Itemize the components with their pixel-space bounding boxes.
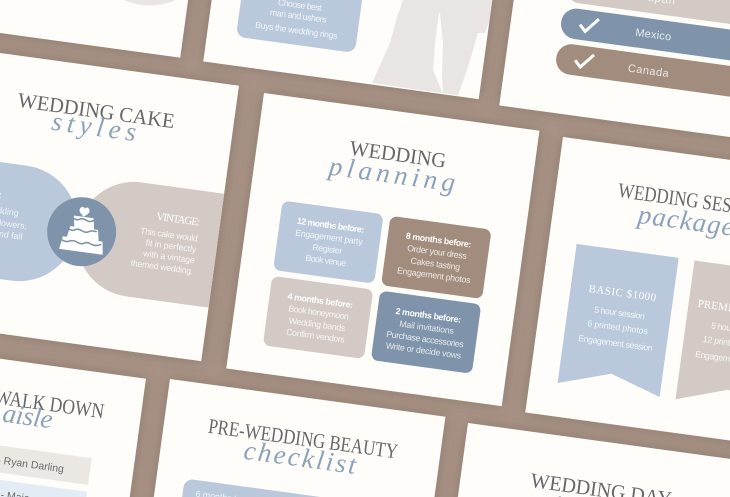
script subtitle: planning xyxy=(325,150,457,198)
list row: maid xyxy=(0,465,87,497)
box: 12 months: Book venue xyxy=(305,253,347,268)
card: top right destinations xyxy=(499,0,730,143)
taupe blob: This cake would xyxy=(140,226,199,244)
pill: Mexico: Mexico xyxy=(635,27,672,44)
silhouette: couple xyxy=(372,0,492,96)
box: 8 months: Order your dress xyxy=(407,243,468,261)
box: 12 months xyxy=(273,201,384,284)
box: 4 months: Book honeymoon xyxy=(288,303,350,322)
box: 4 months: 4 months before: xyxy=(287,291,354,310)
banner: basic: 5 hour session xyxy=(594,304,646,321)
box: 8 months: Cakes tasting xyxy=(410,255,461,272)
box: 4 months: Wedding bands xyxy=(288,316,347,333)
pill: Mexico xyxy=(559,7,730,63)
card: wedding cake styles xyxy=(0,48,239,361)
card: wedding day xyxy=(430,423,730,497)
script subtitle: styles xyxy=(50,106,138,147)
box: 2 months: Mail invitations xyxy=(399,319,455,336)
card: top centre groomsmen xyxy=(203,0,516,99)
script subtitle: checklist xyxy=(242,435,360,480)
banner: premium xyxy=(675,260,730,413)
blue text box: man and ushers xyxy=(269,7,328,25)
taupe blob xyxy=(69,175,224,308)
blue blob xyxy=(0,155,85,289)
card: walk down the aisle xyxy=(0,341,146,497)
banner: basic xyxy=(558,244,679,397)
box: 2 months: Write or decide vows xyxy=(385,340,462,361)
decorative shape xyxy=(78,0,222,14)
box: 4 months xyxy=(263,276,373,359)
box: 2 months: Purchase accessories xyxy=(386,329,465,349)
taupe blob: fit in perfectly xyxy=(145,238,198,254)
list row: best man xyxy=(0,432,92,485)
card: wedding planning xyxy=(226,93,539,406)
banner: basic: BASIC $1000 xyxy=(588,283,657,304)
icon: cake xyxy=(43,193,121,271)
box: 8 months xyxy=(381,216,492,299)
box: 12 months: Engagement party xyxy=(295,228,364,247)
banner: basic: 6 printed photos xyxy=(587,318,649,336)
box: 4 months: Confirm vendors xyxy=(286,327,346,345)
card: wedding session packages xyxy=(525,137,730,450)
box: 12 months: Register xyxy=(312,242,343,256)
card: pre-wedding beauty checklist xyxy=(132,379,445,497)
blue text box xyxy=(236,0,372,53)
pill: taupe xyxy=(564,0,730,27)
taupe blob: VINTAGE: xyxy=(156,211,201,229)
taupe blob: with a vintage xyxy=(142,248,196,265)
title: WEDDING xyxy=(348,136,448,173)
blue text box: Buys the wedding rings xyxy=(255,20,339,41)
blue box xyxy=(175,478,405,497)
box: 2 months: 2 months before: xyxy=(395,306,462,325)
card: top left xyxy=(0,0,236,60)
title: WEDDING CAKE xyxy=(16,88,176,133)
box: 12 months: 12 months before: xyxy=(296,216,365,235)
pill: Canada xyxy=(554,42,730,98)
banner: basic: Engagement session xyxy=(578,333,653,353)
taupe blob: themed wedding. xyxy=(130,258,194,276)
pill: Canada: Canada xyxy=(627,63,670,80)
box: 2 months xyxy=(371,291,481,374)
box: 8 months: 8 months before: xyxy=(405,231,472,250)
box: 8 months: Engagement photos xyxy=(397,265,472,285)
title: PRE-WEDDING BEAUTY xyxy=(207,414,399,463)
script subtitle: aisle xyxy=(1,398,55,434)
